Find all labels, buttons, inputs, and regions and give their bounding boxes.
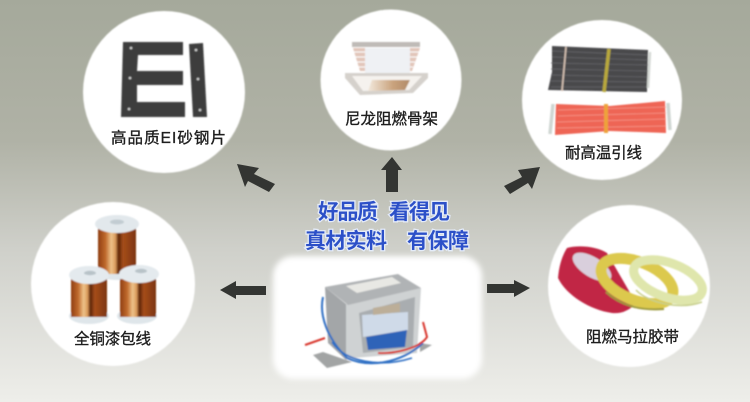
heading: quality slogan: 好品质	[318, 201, 378, 224]
arrow: to tape	[487, 280, 530, 297]
panel: enamelled copper wire	[31, 202, 195, 366]
label: copper wire: 全铜漆包线	[74, 330, 151, 348]
panel: high temperature leads	[522, 20, 682, 180]
arrow: to EI steel	[237, 164, 275, 192]
heading: quality slogan: 有保障	[407, 230, 469, 253]
label: EI silicon steel: 高品质EI砂钢片	[111, 129, 226, 147]
arrow: to copper wire	[220, 281, 266, 299]
icon: bobbin	[345, 42, 428, 95]
heading: quality slogan: 看得见	[389, 201, 450, 224]
label: leads: 耐高温引线	[565, 144, 642, 162]
label: tape: 阻燃马拉胶带	[586, 328, 679, 346]
panel: nylon bobbin	[320, 10, 462, 150]
icon: copper spools	[69, 215, 159, 324]
icon: transformer	[305, 274, 432, 368]
arrow: to bobbin	[381, 157, 402, 192]
arrow: to leads	[504, 167, 540, 194]
icon: EI laminations	[121, 42, 207, 117]
label: nylon bobbin: 尼龙阻燃骨架	[345, 110, 438, 128]
icon: black leads	[548, 46, 650, 92]
panel: transformer product	[273, 256, 482, 379]
panel: EI silicon steel	[83, 11, 245, 173]
heading: quality slogan: 真材实料	[305, 229, 387, 253]
heading: quality slogan	[305, 201, 469, 253]
icon: red leads	[550, 101, 670, 135]
icon: tape rolls	[558, 246, 708, 313]
panel: flame-retardant tape	[548, 205, 710, 367]
